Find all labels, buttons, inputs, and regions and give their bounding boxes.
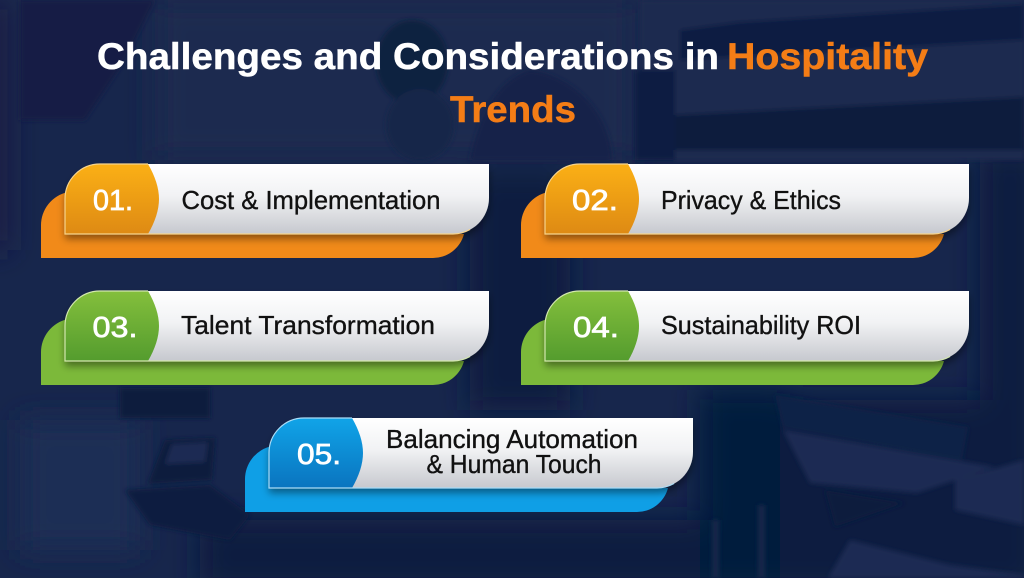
- card 03: Talent Transformation: Talent Transformation: [181, 310, 435, 340]
- card 05: Balancing Automation & Human Touch: [245, 418, 693, 512]
- card 05: Balancing Automation & Human Touch: & Human Touch: [426, 449, 602, 479]
- card 05: Balancing Automation & Human Touch: Balancing Automation: [386, 424, 638, 454]
- card 05: Balancing Automation & Human Touch: 05.: [297, 439, 341, 471]
- title: Challenges and Considerations in: [97, 36, 719, 77]
- card 01: Cost & Implementation: Cost & Implementation: [182, 185, 440, 215]
- card 03: Talent Transformation: 03.: [92, 312, 138, 344]
- card 02: Privacy & Ethics: [521, 164, 969, 258]
- card 04: Sustainability ROI: [521, 291, 969, 385]
- card 01: Cost & Implementation: [41, 164, 489, 258]
- title: [97, 36, 928, 130]
- title: Hospitality: [727, 36, 928, 77]
- card 01: Cost & Implementation: 01.: [93, 185, 133, 217]
- title: Trends: [450, 89, 576, 130]
- card 04: Sustainability ROI: Sustainability ROI: [661, 310, 861, 340]
- card 03: Talent Transformation: [41, 291, 489, 385]
- card 02: Privacy & Ethics: Privacy & Ethics: [661, 185, 841, 215]
- card 02: Privacy & Ethics: 02.: [572, 185, 618, 217]
- card 04: Sustainability ROI: 04.: [573, 312, 619, 344]
